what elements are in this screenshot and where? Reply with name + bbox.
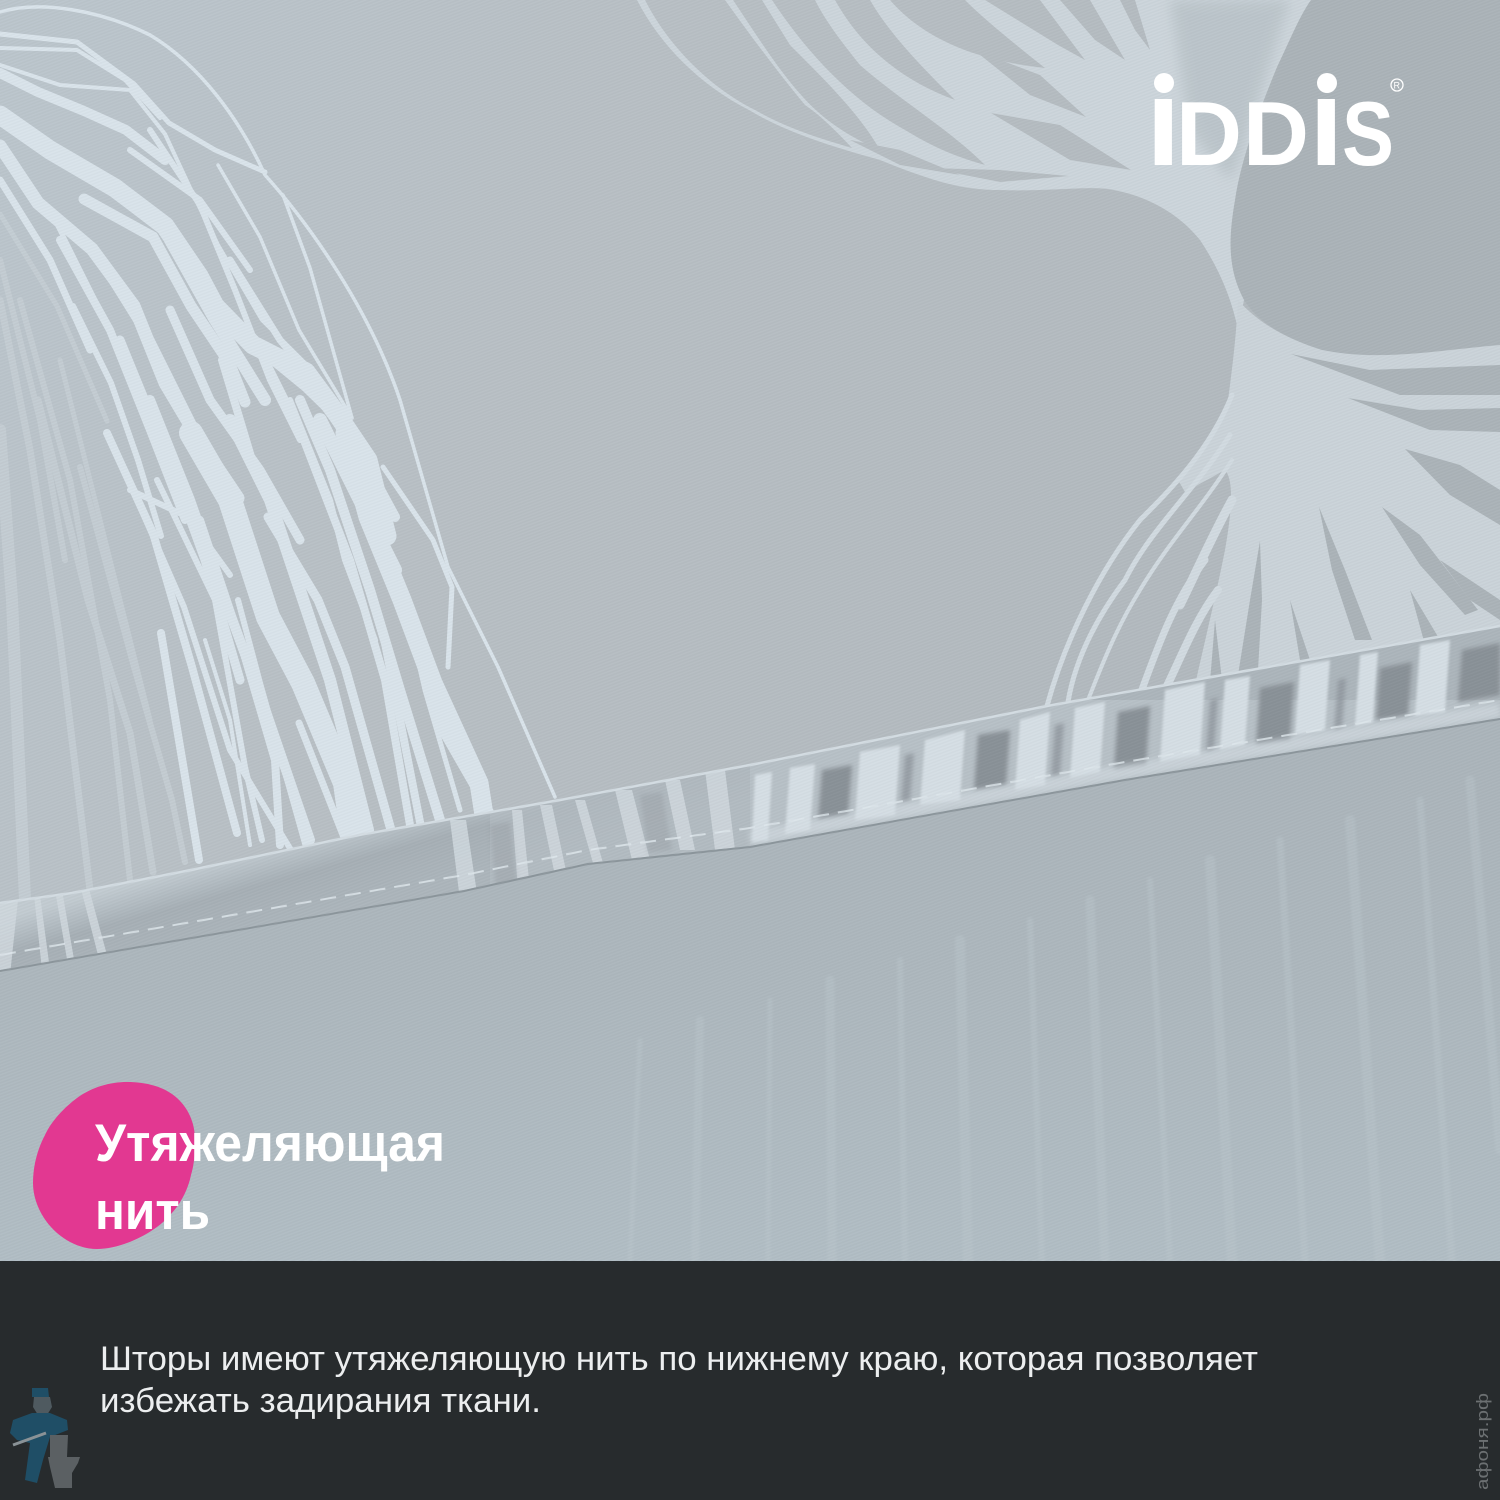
body text [100,1340,1258,1420]
logo: iDDiS: D [1176,84,1242,185]
gaps between top fan strands [645,0,1150,182]
darker right fabric area behind logo [1231,0,1500,355]
hem middle and right base [490,768,750,832]
logo: iDDiS [1154,73,1404,166]
registered mark: R [1394,80,1400,90]
main bright band [191,433,352,833]
hem right pale stripes [752,640,1450,842]
pink accent blob [33,1082,195,1249]
watermark: афоня.рф: афоня.рф [1473,1393,1492,1490]
dim right portion of top fan [1170,0,1290,180]
hem right dark stripes [490,643,1500,893]
plumber cap [32,1388,49,1397]
icon: plumber with toilet [10,1388,80,1488]
heading [95,1114,445,1241]
faint strands on far left [0,214,185,900]
left strands of bottom fan [1047,395,1232,706]
logo: iDDiS: i [1146,53,1181,192]
heading: Утяжеляющая [95,1114,445,1173]
wrench [13,1433,46,1445]
logo: iDDiS: S [1342,84,1394,185]
body text: избежать задирания ткани. [100,1382,541,1420]
toilet bowl [48,1457,80,1488]
body text: Шторы имеют утяжеляющую нить по нижнему краю, которая позволяет [100,1340,1258,1378]
darker gaps in bottom fan [1210,354,1500,682]
faint woven strands on lower fabric [630,780,1500,1262]
bottom hem with weighted thread [0,620,1500,980]
hem stitch line [0,700,1500,955]
hem lower light edge [750,710,1500,838]
heading: нить [95,1182,210,1241]
bottom fan mass [1178,300,1500,685]
toilet tank [50,1435,68,1457]
registered mark [1391,79,1403,91]
secondary bright band [345,433,484,815]
logo: iDDiS: D [1243,84,1309,185]
white strand pattern: left fan [0,7,555,860]
white strand pattern: top right fan [637,0,1500,706]
top fan mass [637,0,1311,330]
plumber face [33,1397,52,1415]
dark footer band [0,1261,1500,1500]
logo: iDDiS: i [1309,53,1344,192]
plumber body [10,1413,68,1483]
lower fabric area below the hem [0,708,1500,1262]
hem top highlight and bottom shadow edges [0,626,1500,971]
hem left stripes [0,770,735,975]
